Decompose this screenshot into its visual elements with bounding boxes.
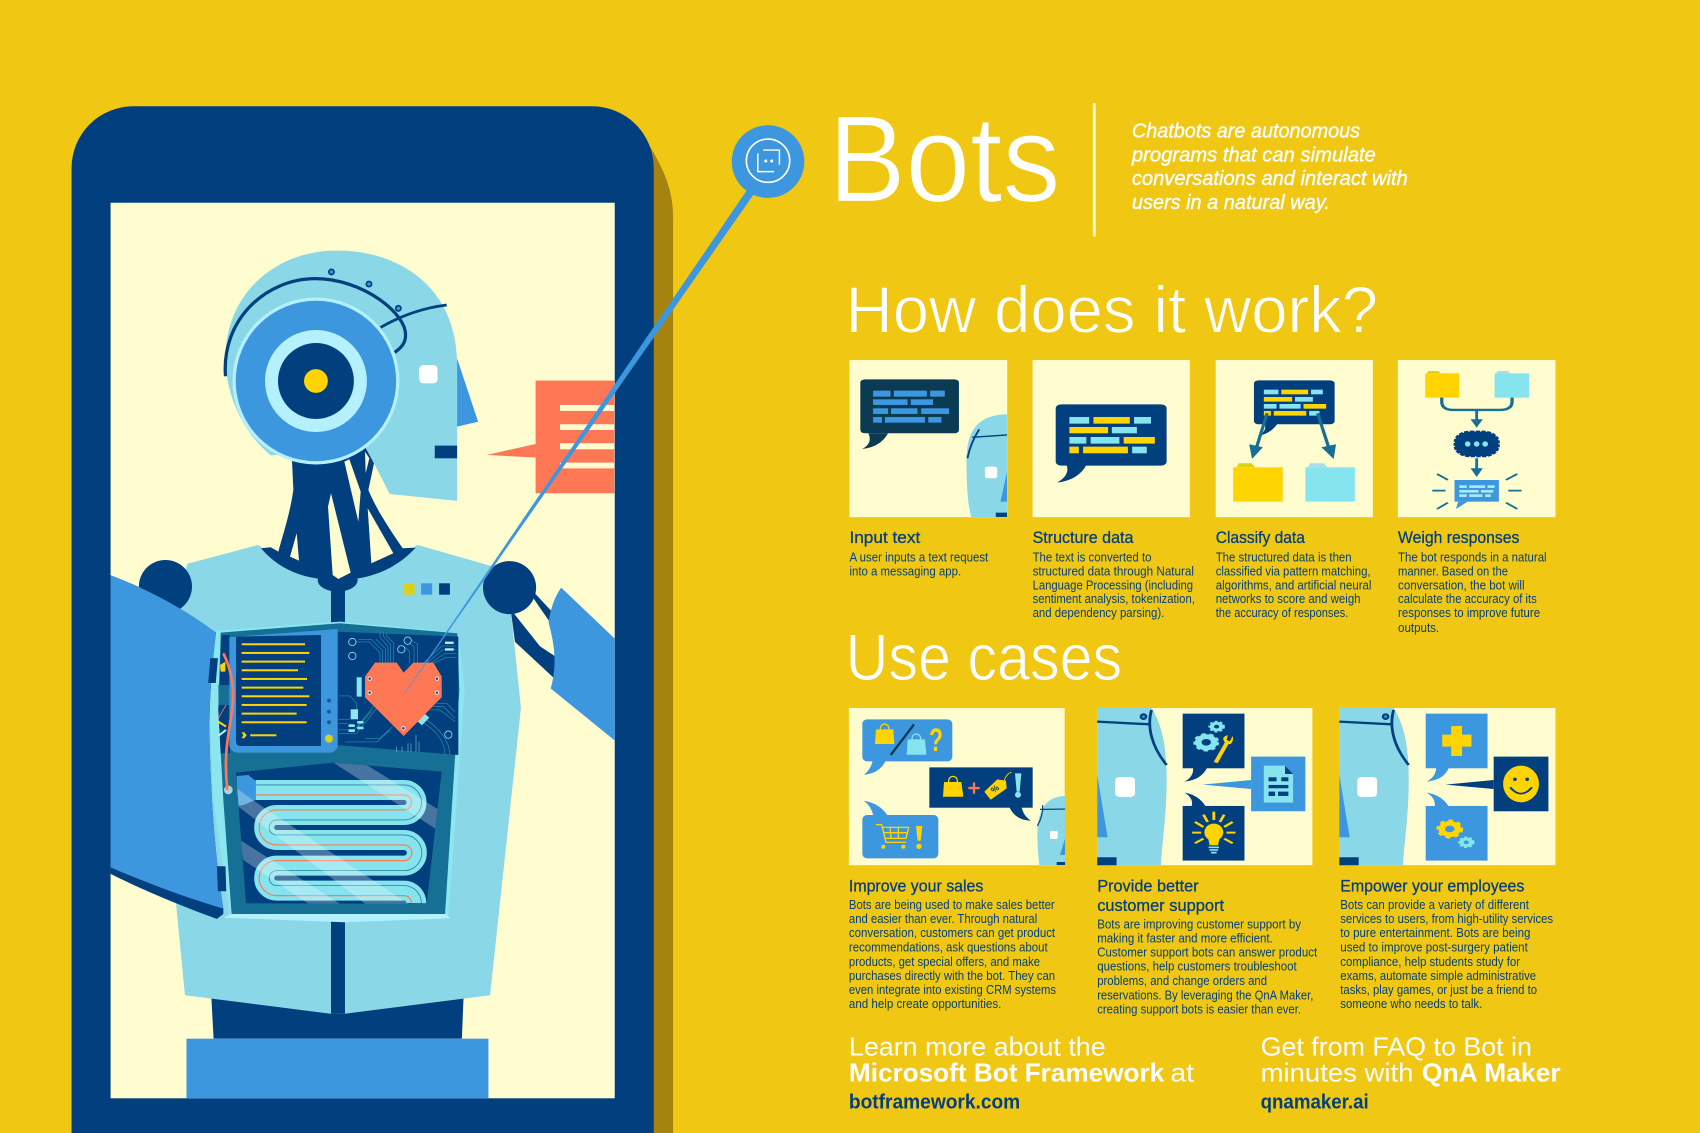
- coil compartment: [236, 763, 442, 904]
- caption: improve your sales: and help create opportunities.: [849, 996, 1001, 1011]
- call to action: bot framework: botframework.com: [849, 1090, 1020, 1113]
- caption: weigh responses: [1398, 529, 1547, 635]
- centre stripe: [331, 569, 345, 1014]
- caption: weigh responses: responses to improve future: [1398, 605, 1540, 620]
- bubble: document: [1202, 757, 1305, 811]
- chest light frame: [209, 622, 465, 917]
- bubble: light bulb: [1183, 793, 1244, 861]
- tagline: conversations and interact with: [1132, 167, 1408, 190]
- caption: empower employees: Bots can provide a variety of different: [1340, 897, 1529, 912]
- bubble: compare bags: [862, 719, 952, 775]
- bubble: cart: [862, 801, 938, 858]
- right arm: [549, 588, 615, 741]
- caption: customer support: reservations. By leveraging the QnA Maker,: [1097, 987, 1313, 1002]
- caption: weigh responses: The bot responds in a natural: [1398, 549, 1547, 564]
- card: input text: [849, 360, 1007, 517]
- circuit traces: [339, 631, 457, 755]
- head: [226, 250, 457, 501]
- caption: classify data: the accuracy of responses.: [1216, 605, 1348, 620]
- phone shadow: [640, 130, 673, 1133]
- call to action: bot framework: Microsoft Bot Framework: [849, 1058, 1165, 1088]
- bubble: gears and wrench: [1183, 714, 1244, 782]
- status squares: [403, 583, 450, 595]
- neck: [261, 447, 416, 592]
- caption: empower employees: exams, automate simple administrative: [1340, 968, 1536, 983]
- robot head crop: [1097, 708, 1167, 865]
- caption: customer support: [1097, 878, 1318, 1016]
- caption: input text: [849, 529, 989, 578]
- bubble: compare bags: ?: [929, 722, 943, 758]
- caption: empower employees: compliance, help students study for: [1340, 954, 1521, 969]
- caption: weigh responses: conversation, the bot will: [1398, 577, 1525, 592]
- caption: improve your sales: purchases directly with the bot. They can: [849, 968, 1055, 983]
- chest cavity: [209, 622, 465, 922]
- title: Bots: [828, 91, 1060, 229]
- caption: classify data: networks to score and weigh: [1216, 591, 1361, 606]
- caption: classify data: algorithms, and artificial neural: [1216, 577, 1371, 592]
- caption: empower employees: services to users, from high-utility services: [1340, 911, 1553, 926]
- caption: structure data: structured data through Natural: [1033, 563, 1194, 578]
- hips: [211, 999, 463, 1039]
- caption: improve your sales: [849, 878, 1056, 1011]
- caption: classify data: The structured data is then: [1216, 549, 1352, 564]
- caption: customer support: creating support bots is easier than ever.: [1097, 1001, 1301, 1016]
- title divider: [1093, 103, 1096, 236]
- left shoulder joint: [139, 560, 192, 613]
- call to action: qna maker: minutes with: [1261, 1058, 1413, 1088]
- heart: [365, 663, 442, 736]
- caption: improve your sales: even integrate into existing CRM systems: [849, 982, 1056, 997]
- call to action: qna maker: Get from FAQ to Bot in: [1261, 1032, 1532, 1062]
- card: weigh responses: [1398, 360, 1555, 517]
- caption: improve your sales: recommendations, ask questions about: [849, 940, 1048, 955]
- bot icon badge: [732, 125, 804, 198]
- tagline: users in a natural way.: [1132, 191, 1330, 214]
- phone screen: [111, 203, 615, 1098]
- caption: improve your sales: Bots are being used to make sales better: [849, 897, 1055, 912]
- call to action: bot framework: [849, 1032, 1195, 1113]
- call to action: qna maker: QnA Maker: [1422, 1058, 1561, 1088]
- caption: customer support: Customer support bots can answer product: [1097, 944, 1318, 959]
- caption: customer support: problems, and change orders and: [1097, 973, 1267, 988]
- call to action: bot framework: at: [1170, 1058, 1195, 1088]
- robot illustration: [111, 250, 615, 1098]
- bubble: gears: [1426, 793, 1488, 861]
- call to action: qna maker: qnamaker.ai: [1261, 1090, 1369, 1113]
- nose: [457, 358, 478, 427]
- call to action: qna maker: [1261, 1032, 1561, 1113]
- tagline: programs that can simulate: [1131, 144, 1376, 167]
- caption: customer support: customer support: [1097, 897, 1225, 915]
- chest bottom rim: [223, 914, 451, 922]
- torso: [163, 545, 521, 1014]
- caption: structure data: Structure data: [1033, 529, 1134, 547]
- caption: improve your sales: and easier than ever. Through natural: [849, 911, 1037, 926]
- wiring bay: [218, 635, 230, 753]
- caption: empower employees: to pure entertainment. Bots are being: [1340, 925, 1530, 940]
- caption: weigh responses: manner. Based on the: [1398, 563, 1508, 578]
- bubble: medical cross: [1426, 714, 1488, 782]
- caption: customer support: questions, help customers troubleshoot: [1097, 958, 1297, 973]
- caption: structure data: The text is converted to: [1033, 549, 1152, 564]
- caption: structure data: Language Processing (including: [1033, 577, 1193, 592]
- caption: improve your sales: conversation, customers can get product: [849, 925, 1056, 940]
- phone body: [72, 106, 654, 1133]
- caption: structure data: sentiment analysis, tokenization,: [1033, 591, 1195, 606]
- tagline: [1131, 120, 1408, 214]
- connector line: [404, 188, 758, 694]
- head wiring: [225, 269, 447, 376]
- caption: structure data: [1033, 529, 1195, 620]
- small robot head: [1037, 796, 1065, 865]
- card: customer support: [1097, 708, 1312, 865]
- caption: weigh responses: calculate the accuracy of its: [1398, 591, 1537, 606]
- caption: customer support: Bots are improving customer support by: [1097, 916, 1302, 931]
- caption: input text: A user inputs a text request: [849, 549, 989, 564]
- speech bubble: [487, 381, 614, 493]
- caption: empower employees: Empower your employees: [1340, 878, 1524, 896]
- caption: improve your sales: products, get special offers, and make: [849, 954, 1040, 969]
- right arm rods: [511, 592, 556, 678]
- heading: use cases: Use cases: [846, 621, 1122, 695]
- caption: weigh responses: Weigh responses: [1398, 529, 1519, 547]
- screen panel: [229, 629, 338, 753]
- right shoulder joint: [483, 561, 536, 614]
- caption: structure data: and dependency parsing).: [1033, 605, 1164, 620]
- coil: [237, 763, 442, 906]
- caption: input text: Input text: [849, 529, 921, 547]
- caption: classify data: [1216, 529, 1371, 620]
- eye light: [419, 365, 438, 383]
- bubble: bag plus tag: %: [989, 782, 1001, 795]
- card: classify data: [1216, 360, 1373, 517]
- caption: empower employees: tasks, play games, or just be a friend to: [1340, 982, 1537, 997]
- robot head crop: [1339, 708, 1409, 865]
- caption: empower employees: [1340, 878, 1553, 1011]
- heading: how does it work: How does it work?: [846, 274, 1378, 348]
- caption: customer support: Provide better: [1097, 878, 1199, 896]
- caption: customer support: making it faster and more efficient.: [1097, 930, 1273, 945]
- call to action: bot framework: Learn more about the: [849, 1032, 1106, 1062]
- caption: empower employees: someone who needs to talk.: [1340, 996, 1482, 1011]
- circuit board: [310, 631, 458, 755]
- caption: weigh responses: outputs.: [1398, 620, 1439, 635]
- card: empower employees: [1339, 708, 1555, 865]
- chest teal frame: [218, 623, 459, 915]
- coral wire: [223, 653, 233, 794]
- card: improve your sales: [849, 708, 1065, 865]
- chest door: [111, 575, 226, 919]
- caption: classify data: classified via pattern matching,: [1216, 563, 1371, 578]
- circuit components: [348, 637, 454, 738]
- bubble: bag plus tag: [929, 767, 1033, 821]
- caption: empower employees: used to improve post-surgery patient: [1340, 940, 1528, 955]
- card: structure data: [1033, 360, 1190, 517]
- caption: classify data: Classify data: [1216, 529, 1306, 547]
- tagline: Chatbots are autonomous: [1132, 120, 1360, 143]
- caption: input text: into a messaging app.: [849, 563, 961, 578]
- caption: improve your sales: Improve your sales: [849, 878, 983, 896]
- base: [186, 1039, 488, 1098]
- bubble: smile: [1446, 757, 1548, 811]
- mouth: [435, 446, 457, 458]
- ear disk: [232, 298, 399, 464]
